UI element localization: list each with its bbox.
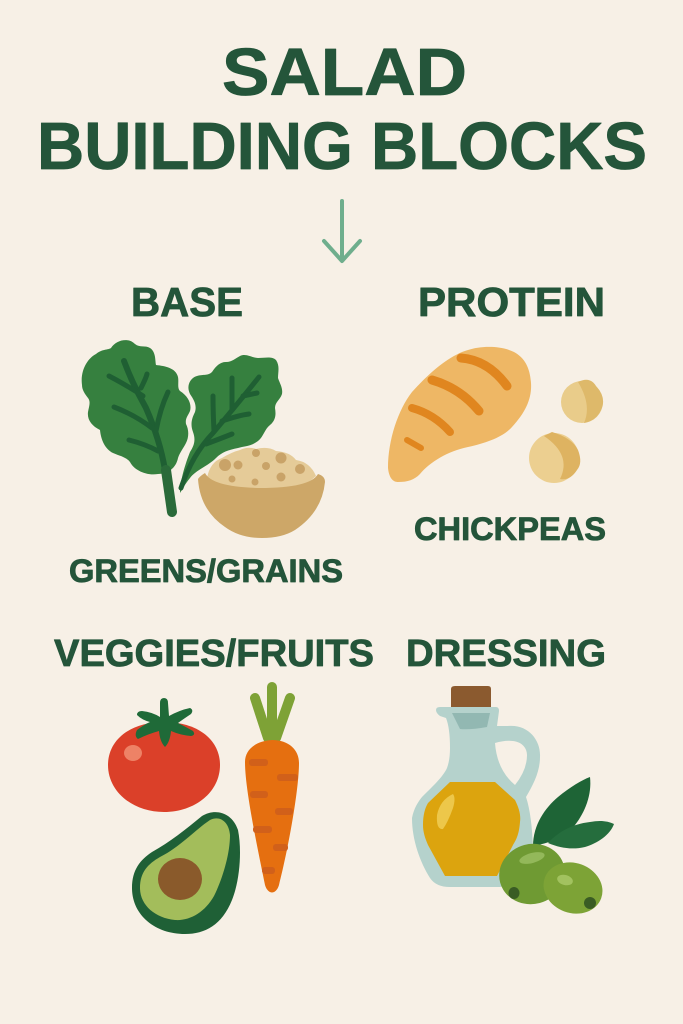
title xyxy=(37,35,647,184)
heading: base: BASE xyxy=(131,279,243,325)
panel: veggies and fruits xyxy=(54,633,374,934)
heading: veggies/fruits: VEGGIES/FRUITS xyxy=(54,633,374,675)
jug body with handle xyxy=(412,707,540,887)
icon: avocado xyxy=(132,812,240,934)
cork xyxy=(451,686,491,708)
arrow pointing down xyxy=(324,201,360,261)
icon: right green leaf xyxy=(180,355,282,493)
icon: olive leaves xyxy=(533,777,614,848)
title: BUILDING BLOCKS xyxy=(37,109,647,184)
panel: dressing xyxy=(406,633,614,922)
icon: left green leaf xyxy=(82,340,191,512)
icon: chicken breast xyxy=(388,347,531,482)
heading: dressing: DRESSING xyxy=(406,633,606,675)
heading: protein: PROTEIN xyxy=(418,279,605,325)
icon: carrot xyxy=(245,687,299,892)
panel: protein xyxy=(388,279,606,547)
icon: chickpeas xyxy=(529,380,603,483)
title: SALAD xyxy=(222,35,467,110)
icon: oil jug xyxy=(412,686,540,887)
label: chickpeas: CHICKPEAS xyxy=(414,511,606,547)
icon: green olives xyxy=(492,836,610,922)
icon: grain bowl xyxy=(198,448,325,538)
oil xyxy=(423,782,520,876)
label: greens/grains: GREENS/GRAINS xyxy=(69,553,343,589)
icon: tomato xyxy=(108,698,220,812)
panel: base xyxy=(69,279,343,589)
